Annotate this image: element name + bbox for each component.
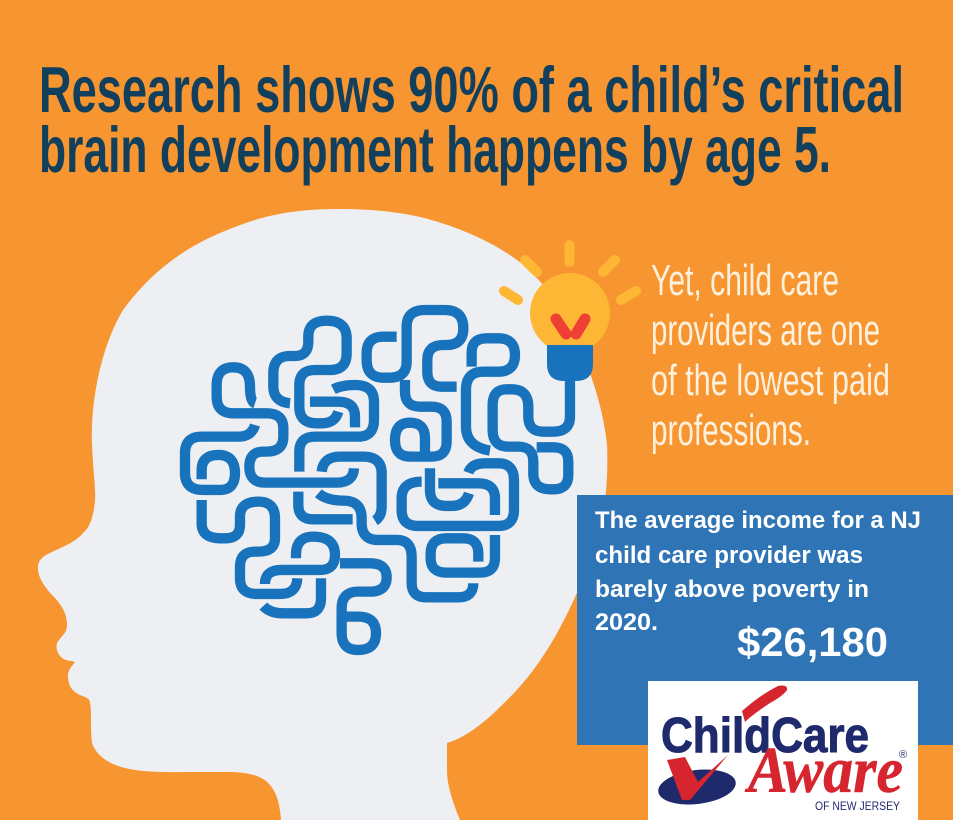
income text [595, 507, 921, 636]
income text: The average income for a NJ [595, 507, 921, 534]
logo: Child Care Aware of New Jersey: Aware [744, 734, 903, 807]
income text: barely above poverty in [595, 576, 869, 603]
income figure: $26,180 [737, 619, 888, 665]
icon: light bulb [504, 245, 636, 381]
logo: Child Care Aware of New Jersey [648, 681, 918, 820]
side statement: Yet, child care [651, 256, 839, 305]
logo: Child Care Aware of New Jersey: ChildCare [661, 709, 869, 763]
logo: Child Care Aware of New Jersey: ® [899, 749, 907, 761]
side statement: professions. [651, 406, 811, 455]
head silhouette [38, 209, 607, 820]
title [39, 53, 904, 186]
panel: income box [577, 495, 953, 745]
income text: 2020. [595, 609, 658, 636]
brain maze [185, 310, 570, 650]
logo: Child Care Aware of New Jersey: OF NEW JERSEY [815, 799, 900, 813]
income text: child care provider was [595, 542, 863, 569]
side statement [651, 256, 890, 455]
